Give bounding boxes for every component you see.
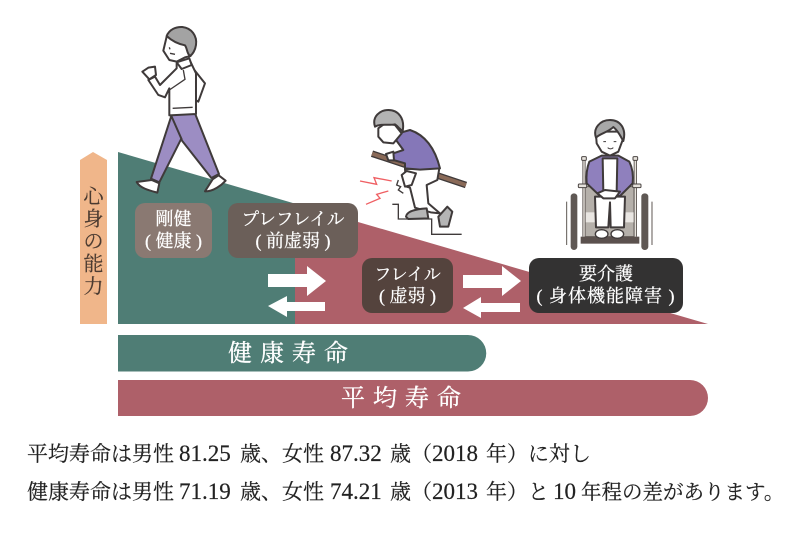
label: long-term care: 要介護 <box>579 264 633 284</box>
head <box>596 132 623 156</box>
sleeve crease <box>169 70 185 90</box>
text: average life expectancy note: 87.32 <box>330 441 382 466</box>
shoes <box>406 208 428 219</box>
fist <box>142 67 156 79</box>
hands <box>597 190 620 198</box>
axis arrow: mental and physical ability <box>80 152 107 324</box>
text: healthy life expectancy note: 71.19 <box>179 479 231 504</box>
bar: average life expectancy <box>118 380 708 416</box>
armrests <box>578 184 587 188</box>
hands <box>386 152 394 160</box>
text: healthy life expectancy note: 歳、女性 <box>240 480 324 504</box>
text: healthy life expectancy note: 年程の差があります。 <box>581 481 784 504</box>
arrows: pre-frailty and frailty transition <box>268 266 326 317</box>
cardigan <box>586 156 633 196</box>
hair <box>595 120 624 141</box>
text: healthy life expectancy note: 年）と <box>486 480 549 504</box>
bar: average life expectancy: 平均寿命 <box>341 385 469 412</box>
legs <box>405 168 440 213</box>
collar <box>177 58 192 69</box>
label: pre-frailty: ( 前虚弱 ) <box>256 231 330 252</box>
head <box>163 37 191 62</box>
illustration: walking person <box>137 27 226 193</box>
shoes <box>595 230 608 238</box>
jacket <box>148 59 196 115</box>
head <box>378 123 402 143</box>
shirt <box>603 158 617 192</box>
chair poles <box>584 158 635 237</box>
axis arrow: mental and physical ability: 能 <box>84 252 104 276</box>
text: healthy life expectancy note: 10 <box>553 479 576 504</box>
lightning <box>360 178 392 204</box>
bar: healthy life expectancy: 健康寿命 <box>228 340 356 367</box>
text: healthy life expectancy note: 歳（ <box>390 480 432 504</box>
label: pre-frailty <box>228 203 358 258</box>
trousers <box>151 113 219 182</box>
handrail <box>372 154 466 185</box>
label: frailty: ( 虚弱 ) <box>379 286 436 307</box>
rear wheels <box>571 193 577 250</box>
text: average life expectancy note: 歳（ <box>390 442 432 466</box>
back arm <box>192 67 205 102</box>
axis arrow: mental and physical ability: 身 <box>84 208 104 230</box>
text: average life expectancy note: 2018 <box>432 441 478 466</box>
face details <box>169 47 175 54</box>
label: robust: 剛健 <box>156 209 192 229</box>
text: healthy life expectancy note: 2013 <box>432 479 478 504</box>
stairs <box>392 204 462 234</box>
chart: declining ability wedge <box>118 152 708 324</box>
label: frailty <box>362 258 453 313</box>
chair back <box>585 187 634 237</box>
label: long-term care: ( 身体機能障害 ) <box>536 286 676 307</box>
text: average life expectancy note: 平均寿命は男性 <box>27 442 174 466</box>
illustration: person on stairs with knee pain <box>360 110 466 234</box>
label: long-term care <box>529 258 683 313</box>
label: robust <box>135 203 212 258</box>
hair <box>374 110 403 131</box>
axis arrow: mental and physical ability: の <box>84 231 104 253</box>
label: pre-frailty: プレフレイル <box>242 209 345 229</box>
wedge: teal healthy section <box>118 152 295 324</box>
sweater <box>393 130 440 170</box>
pain squiggle <box>397 180 403 193</box>
label: frailty: フレイル <box>374 265 441 284</box>
text: average life expectancy note: 歳、女性 <box>240 442 324 466</box>
text: healthy life expectancy note: 健康寿命は男性 <box>27 480 174 504</box>
face <box>603 142 616 149</box>
axis arrow: mental and physical ability: 力 <box>84 275 104 298</box>
bar: healthy life expectancy <box>118 335 486 372</box>
text: healthy life expectancy note: 74.21 <box>330 479 382 504</box>
text: average life expectancy note: 年）に対し <box>486 442 591 466</box>
wedge: red frail section <box>295 204 708 324</box>
hair <box>167 27 196 56</box>
trousers <box>595 197 625 227</box>
axis arrow: mental and physical ability: 心 <box>84 185 106 208</box>
text: average life expectancy note: 81.25 <box>179 441 231 466</box>
seat <box>581 237 639 244</box>
shoes <box>137 180 159 193</box>
illustration: person in wheelchair <box>567 120 652 250</box>
arrows: frailty and care transition <box>463 266 521 318</box>
label: robust: ( 健康 ) <box>145 231 202 252</box>
